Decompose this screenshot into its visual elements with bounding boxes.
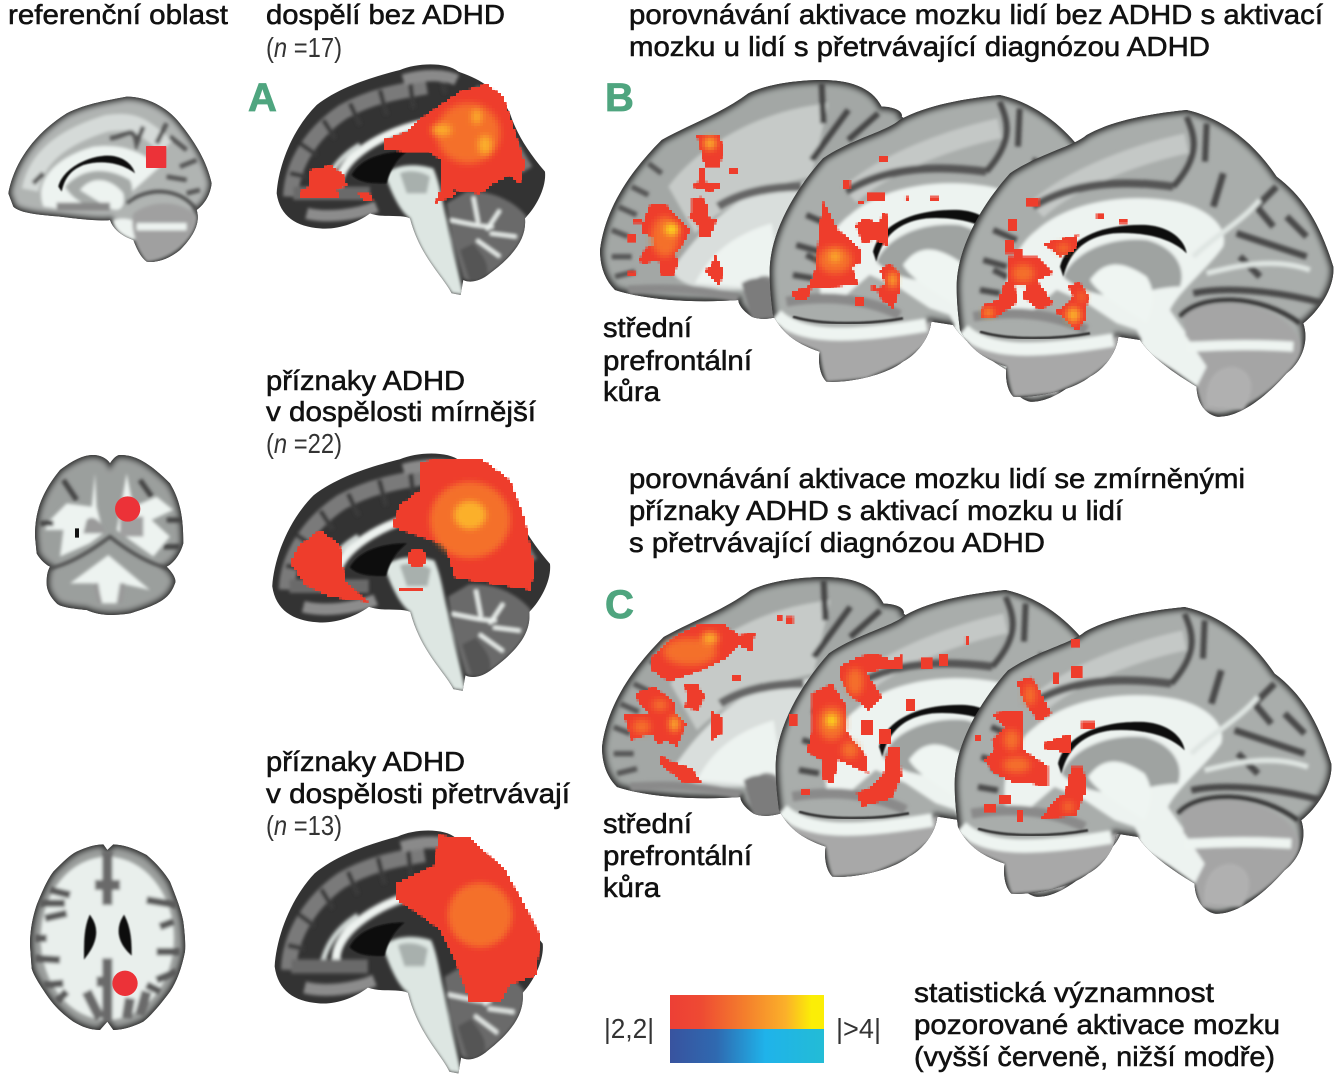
heading: persistent ADHD symptoms (266, 746, 570, 841)
heading: comparison B (629, 0, 1323, 62)
marker: reference region (112, 971, 138, 996)
caption: medial prefrontal cortex B: střední (603, 312, 692, 343)
brain slice C3 (955, 607, 1331, 914)
legend caption: statistická významnost (914, 977, 1214, 1008)
heading: persistent ADHD symptoms: v dospělosti přetrvávají (266, 778, 570, 809)
caption: medial prefrontal cortex C: střední (603, 808, 692, 839)
brain: reference sagittal (8, 97, 212, 262)
heading: adults without ADHD: (n =17) (266, 32, 342, 63)
brains: panel B slices (600, 80, 1333, 417)
heading: milder ADHD symptoms (266, 365, 536, 459)
brain slice B2 (770, 95, 1146, 402)
heading: comparison C: příznaky ADHD s aktivací mozku u lidí (629, 495, 1123, 526)
caption: medial prefrontal cortex B: kůra (603, 376, 660, 407)
panel label A: A (248, 76, 277, 120)
caption: medial prefrontal cortex C (603, 808, 752, 903)
heading: comparison B: mozku u lidí s přetrvávající diagnózou ADHD (629, 31, 1210, 62)
panel label C: C (605, 583, 634, 627)
caption: medial prefrontal cortex C: kůra (603, 872, 660, 903)
heading: milder ADHD symptoms: (n =22) (266, 428, 342, 459)
brain slice C1 (602, 577, 957, 817)
brain: reference coronal (35, 455, 183, 615)
brain: milder symptoms with activation (272, 453, 550, 691)
legend caption: (vyšší červeně, nižší modře) (914, 1041, 1275, 1072)
panel label B: B (605, 76, 634, 120)
marker: reference region (147, 147, 166, 167)
heading: comparison C: s přetrvávající diagnózou ADHD (629, 527, 1045, 558)
brain slice B1 (600, 80, 955, 320)
heading: persistent ADHD symptoms: příznaky ADHD (266, 746, 465, 777)
brain: reference axial (30, 844, 185, 1030)
legend: colour scale (604, 995, 881, 1063)
heading: milder ADHD symptoms: příznaky ADHD (266, 365, 465, 396)
heading: persistent ADHD symptoms: (n =13) (266, 810, 342, 841)
marker: reference region (115, 496, 140, 522)
brains: panel C slices (602, 577, 1331, 914)
brain: persistent symptoms with activation (275, 831, 543, 1073)
caption: medial prefrontal cortex B (603, 312, 752, 407)
legend: colour scale: |2,2| (604, 1013, 654, 1044)
brain: adults without ADHD with activation (277, 64, 545, 295)
heading: comparison C (629, 463, 1245, 558)
legend: colour scale: |>4| (836, 1013, 881, 1044)
brain slice B3 (957, 110, 1333, 417)
heading: milder ADHD symptoms: v dospělosti mírnější (266, 396, 536, 427)
caption: medial prefrontal cortex B: prefrontální (603, 345, 752, 376)
caption: medial prefrontal cortex C: prefrontální (603, 840, 752, 871)
brain slice C2 (776, 590, 1152, 897)
heading: adults without ADHD (266, 0, 505, 63)
heading: comparison C: porovnávání aktivace mozku lidí se zmírněnými (629, 463, 1245, 494)
legend caption (914, 977, 1280, 1072)
legend caption: pozorované aktivace mozku (914, 1009, 1280, 1040)
